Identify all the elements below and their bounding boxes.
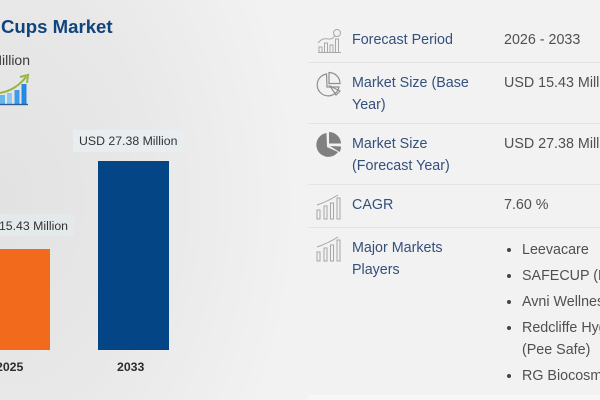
label: CAGR: CAGR <box>352 197 393 213</box>
axis label 2033: 2033 <box>117 360 144 374</box>
value text 2033: USD 27.38 Million <box>79 134 177 148</box>
label: market size base year: Market Size (Base <box>352 75 469 91</box>
value: forecast period: 2026 - 2033 <box>504 32 580 48</box>
bar: 2033 <box>98 161 169 350</box>
label: major market players: Major Markets <box>352 240 443 256</box>
value: CAGR: 7.60 % <box>504 197 549 213</box>
list: market players <box>507 242 600 384</box>
list: market players: Leevacare <box>522 242 589 258</box>
panel: market chart <box>0 0 292 400</box>
icon: forecast period <box>318 29 341 53</box>
icon: growth chart <box>0 74 30 106</box>
panel: market facts table: Players <box>352 262 400 278</box>
panel: market facts table: (Forecast Year) <box>352 158 450 174</box>
heading: Cups Market <box>1 16 113 37</box>
list: market players: (Pee Safe) <box>522 342 590 358</box>
value label 2033 <box>73 130 184 152</box>
label: forecast period: Forecast Period <box>352 32 453 48</box>
label: market size forecast year: Market Size <box>352 136 427 152</box>
icon: CAGR <box>316 194 340 220</box>
panel: market facts table: Year) <box>352 97 386 113</box>
bar: 2025 <box>0 249 50 350</box>
value label 2025 <box>0 214 74 236</box>
icon: market size base year <box>316 72 341 96</box>
icon: major market players <box>316 236 340 262</box>
panel: market facts table <box>292 0 600 400</box>
icon: market size forecast year <box>316 132 341 157</box>
